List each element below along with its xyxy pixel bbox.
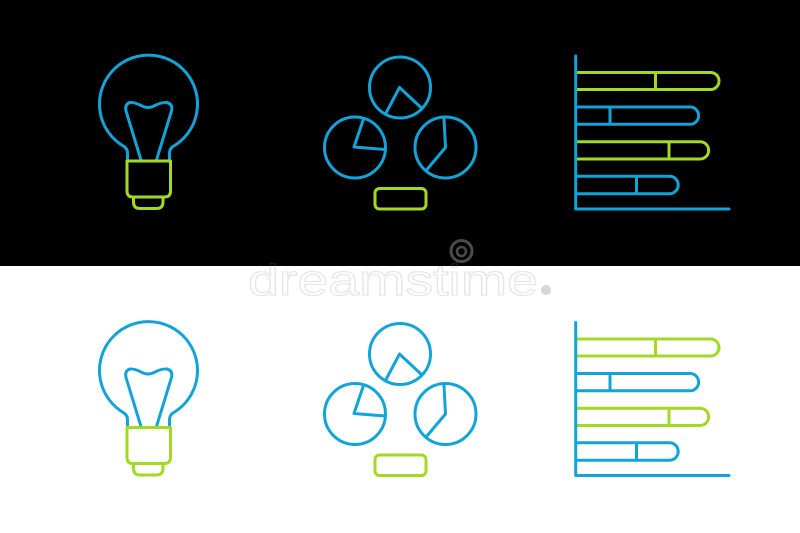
panel: white background [0, 266, 800, 533]
icon: horizontal bar chart on white [576, 322, 729, 476]
icon: horizontal bar chart on black [576, 56, 729, 209]
icon: light bulb on white [100, 322, 198, 475]
watermark: dreamstime logo: dreamstime [248, 256, 538, 305]
icon: three pie charts on black [324, 57, 476, 209]
watermark: dreamstime logo [248, 240, 551, 305]
icon: light bulb on black [100, 55, 198, 208]
icon: three pie charts on white [324, 324, 476, 476]
panel: black background [0, 0, 800, 266]
